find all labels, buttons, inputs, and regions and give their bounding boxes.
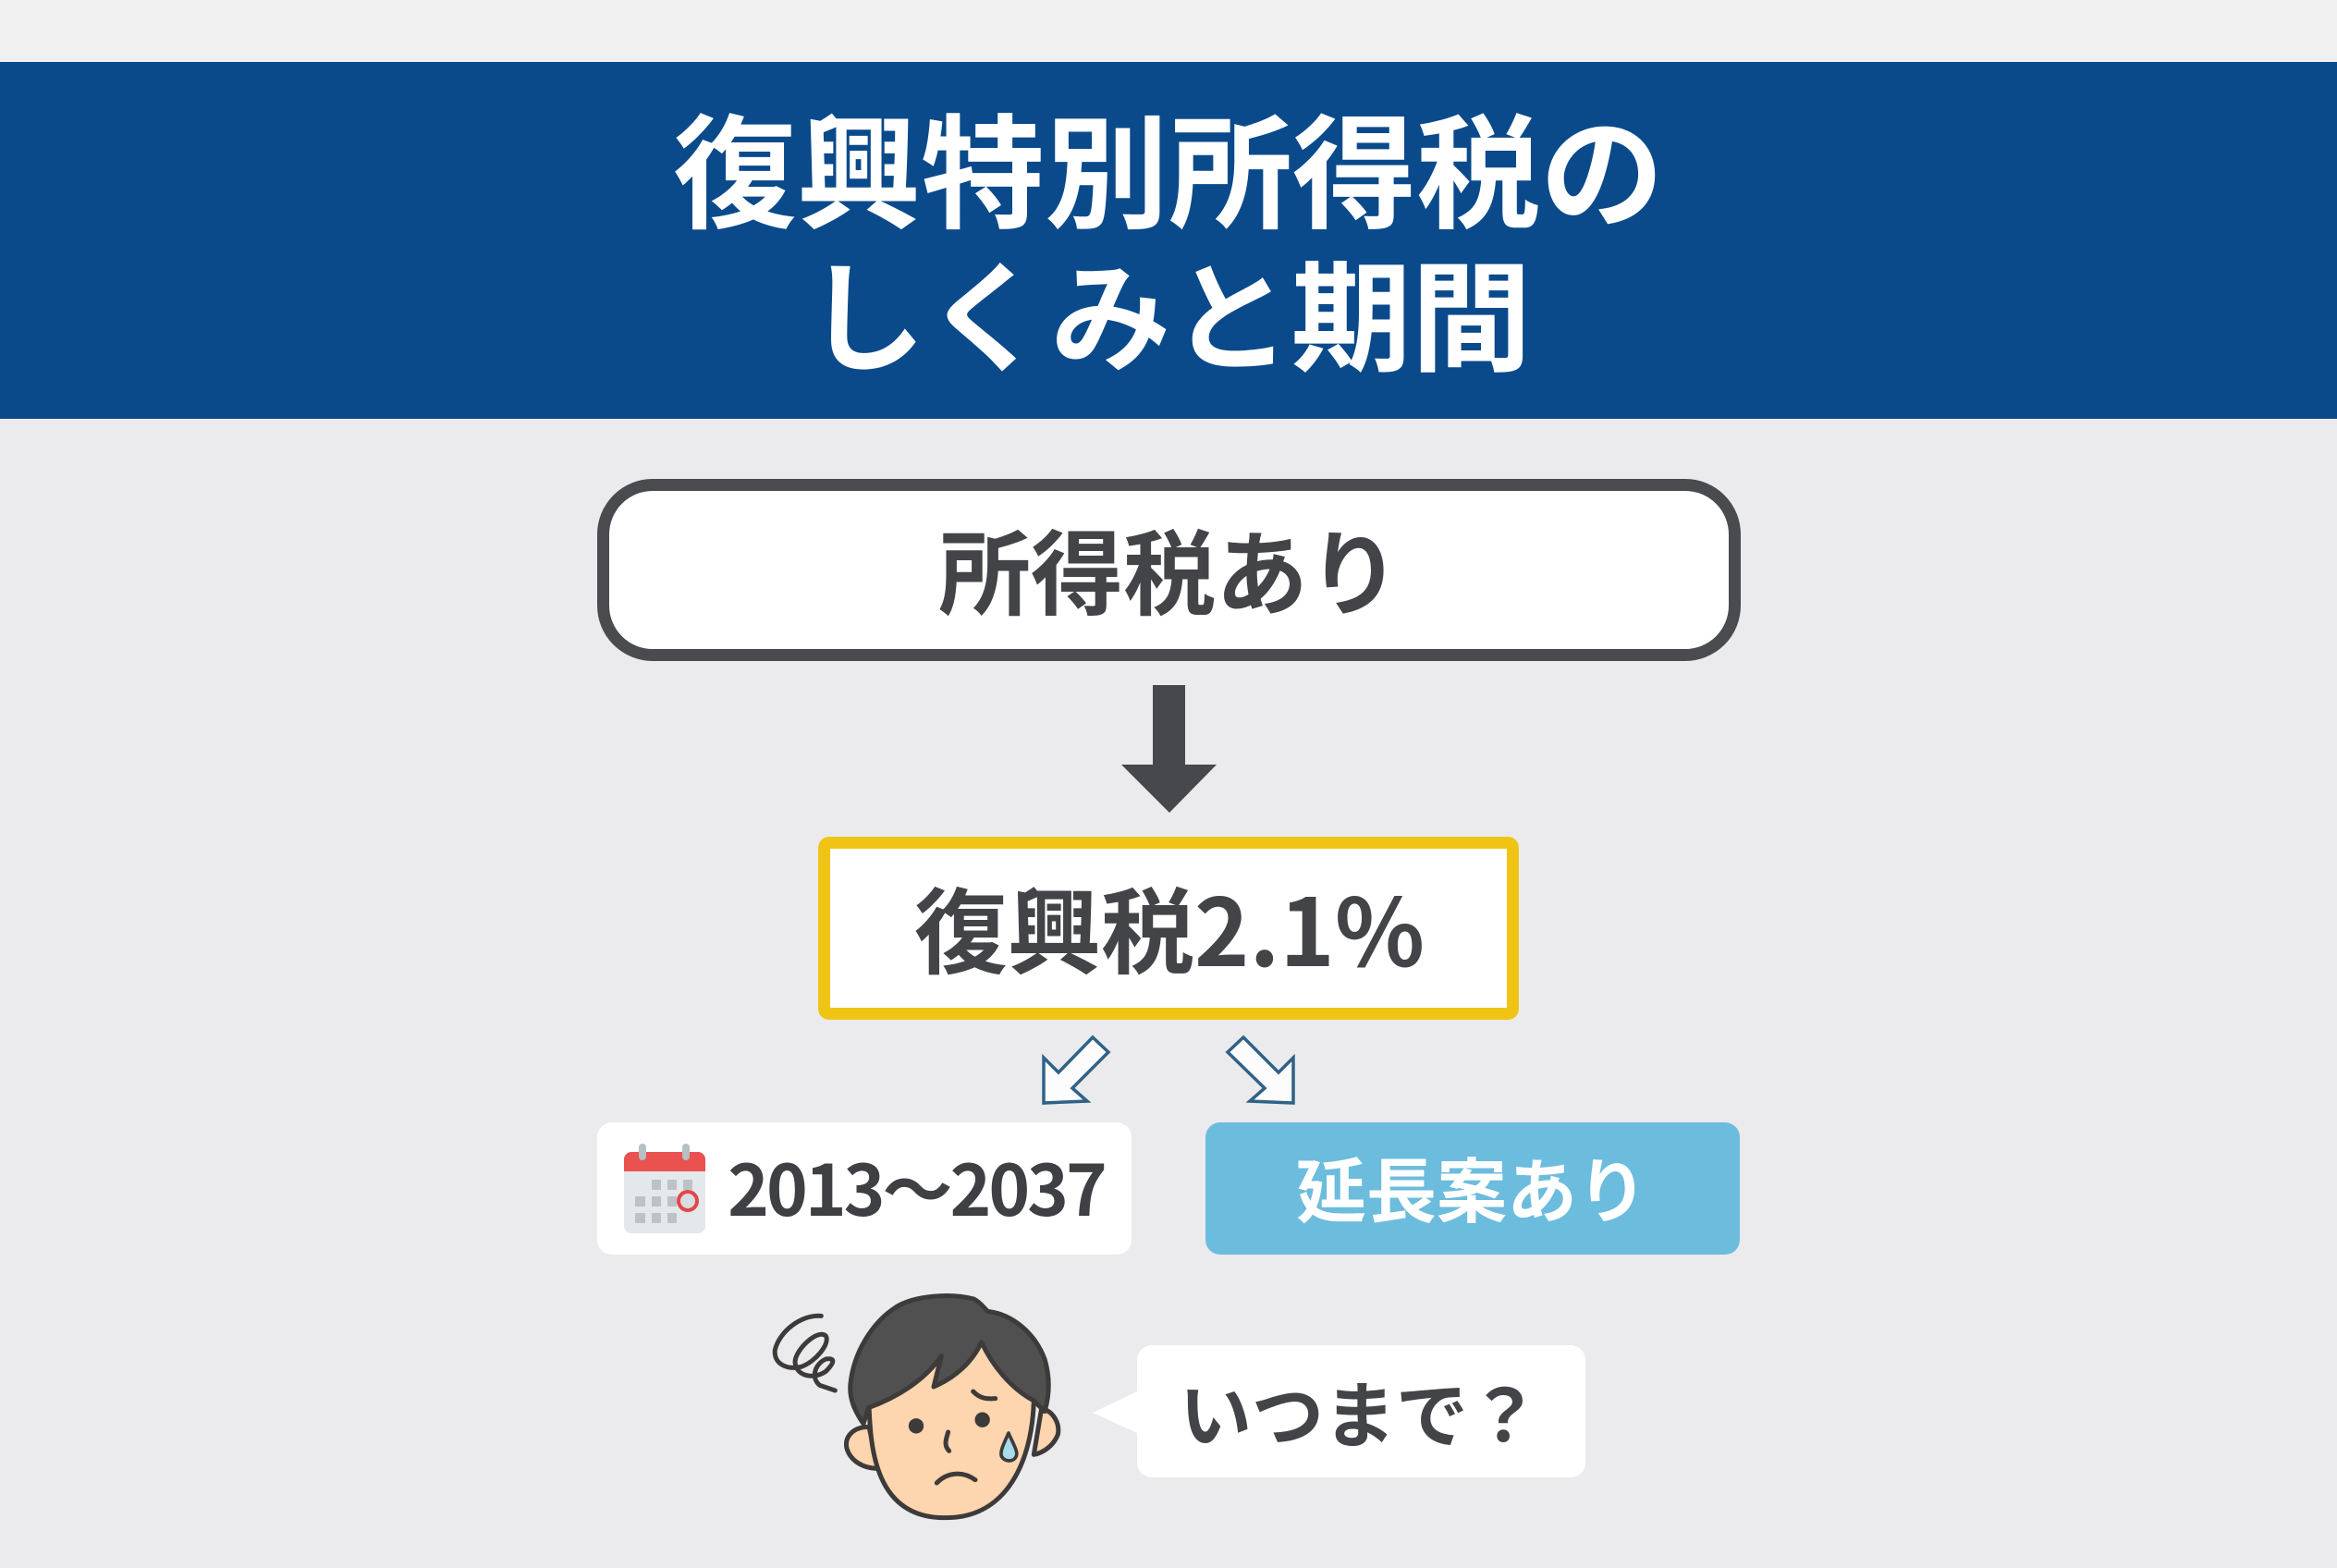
arrow: down left (1042, 1035, 1111, 1105)
title banner (0, 62, 2337, 419)
title heading: 復興特別所得税の (673, 75, 1664, 254)
icon: worried person (773, 1293, 1061, 1520)
bubble shape (1093, 1345, 1585, 1477)
box: income tax: 所得税あり (938, 500, 1401, 634)
arrow: down (1121, 685, 1217, 813)
bubble text: いつまで？ (1180, 1359, 1540, 1463)
box: period (597, 1122, 1132, 1255)
icon: calendar (624, 1144, 705, 1233)
title heading (673, 75, 1664, 397)
box: income tax (597, 479, 1741, 661)
speech bubble (1093, 1345, 1585, 1477)
box: reconstruction tax: 復興税2.1% (914, 859, 1425, 994)
box: extension proposal: 延長案あり (1296, 1135, 1647, 1237)
title heading: しくみと期間 (805, 223, 1532, 397)
arrow: down right (1226, 1035, 1295, 1105)
period text: 2013～2037 (728, 1134, 1105, 1236)
box: reconstruction tax (818, 837, 1519, 1020)
box: extension proposal (1205, 1122, 1740, 1255)
